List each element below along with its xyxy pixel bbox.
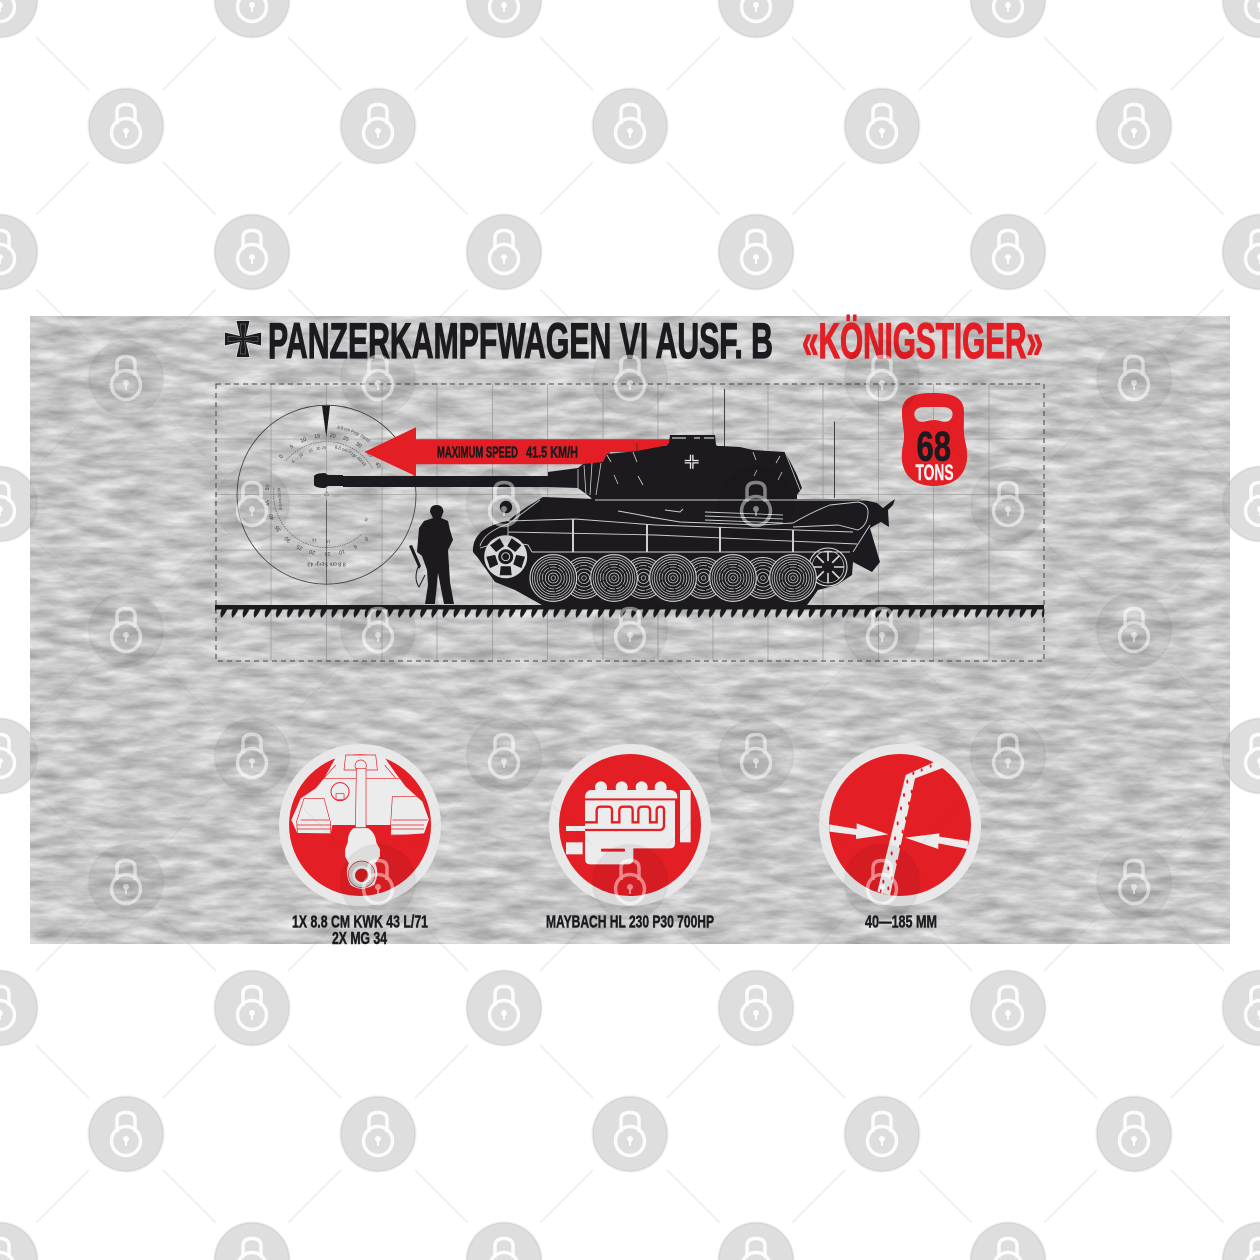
gun sight reticle: 45 [265, 499, 272, 506]
gun sight reticle: 25 [322, 446, 326, 450]
commander periscope [500, 500, 512, 514]
speed label: MAXIMUM SPEED [437, 444, 518, 462]
weight unit: TONS [916, 460, 954, 485]
road wheels, back row [564, 558, 784, 598]
gun sight reticle: 25 [342, 435, 349, 443]
icon: iron cross [224, 320, 262, 358]
gun sight reticle: 35 [365, 450, 374, 459]
drive sprocket [484, 535, 527, 578]
panel: heather grey fabric [30, 316, 1230, 944]
gun sight reticle: 20 [316, 446, 321, 451]
gun sight reticle: 10 [326, 539, 330, 543]
title: nickname: «KÖNIGSTIGER» [802, 313, 1043, 369]
gun sight reticle: 40 [373, 461, 381, 469]
icon: kettlebell weight [902, 393, 967, 486]
gun sight reticle: 5 [291, 460, 296, 464]
gun sight reticle: 20 [309, 548, 316, 555]
gun sight reticle: 30 [284, 535, 292, 543]
ground line with hatching [215, 605, 1044, 618]
icon: armor plate with arrows [829, 761, 968, 896]
icon: engine [566, 781, 691, 864]
armament label: 2X MG 34 [332, 928, 387, 948]
collar ribs and turret marks [578, 452, 800, 495]
gun sight reticle: 25 [363, 517, 369, 522]
panel: engine badge [549, 744, 711, 906]
tank silhouette: Königstiger [314, 389, 895, 605]
road wheels, front row [530, 555, 816, 601]
armor label: 40—185 MM [865, 912, 937, 932]
gun barrel and muzzle brake [314, 473, 550, 488]
panel: armament badge [279, 744, 441, 906]
gun sight reticle: 30 [354, 441, 363, 450]
gun sight reticle: 50 [265, 484, 272, 491]
gun sight reticle: 15 [314, 433, 321, 440]
gun sight reticle: 0 [278, 454, 285, 460]
gun sight reticle: 15 [324, 550, 331, 556]
gun sight reticle: 10 [300, 437, 307, 445]
gun sight reticle: 5 [289, 444, 295, 451]
gun sight reticle: 8.8 cm Pzgr 40/43 [334, 446, 366, 466]
soldier silhouette [409, 505, 454, 604]
gun sight reticle: 10 [338, 548, 345, 555]
balkenkreuz [685, 455, 699, 469]
weight value: 68 [916, 422, 951, 470]
gun sight reticle: 15 [308, 448, 313, 453]
spec grid: dashed frame with grid lines [216, 384, 1044, 661]
gun sight reticle: 15 [312, 537, 317, 542]
engine label: MAYBACH HL 230 P30 700HP [546, 912, 714, 932]
gun sight reticle: 5 [352, 543, 358, 549]
hull strap and track guard details [480, 500, 877, 552]
gun sight reticle: 8.8 cm Pzgr 39/43 [337, 426, 370, 442]
antennas [637, 389, 834, 498]
title: PANZERKAMPFWAGEN VI AUSF. B [268, 313, 773, 369]
armament label: 1X 8.8 CM KWK 43 L/71 [292, 912, 428, 932]
gun sight reticle: 8.8 cm Gr 39 [277, 488, 283, 510]
turret [548, 446, 802, 502]
gun sight reticle: 40 [268, 513, 276, 521]
hull [473, 497, 895, 605]
panel: armor badge [819, 744, 981, 906]
gun sight reticle: 0 [363, 535, 369, 542]
gun sight reticle: 35 [274, 524, 283, 533]
icon: tank front view [291, 754, 429, 889]
gun sight reticle [236, 404, 416, 585]
gun sight reticle: 8.8 cm Sprgr 43 [307, 561, 346, 567]
idler wheel [809, 548, 847, 586]
gun sight reticle: 20 [329, 433, 336, 440]
speed label: 41.5 KM/H [526, 444, 578, 462]
arrow: maximum speed [364, 427, 670, 476]
gun sight reticle: 25 [296, 543, 304, 551]
cupola [664, 435, 722, 449]
gun sight reticle: 10 [298, 453, 304, 458]
watermark over panel [30, 316, 1230, 944]
